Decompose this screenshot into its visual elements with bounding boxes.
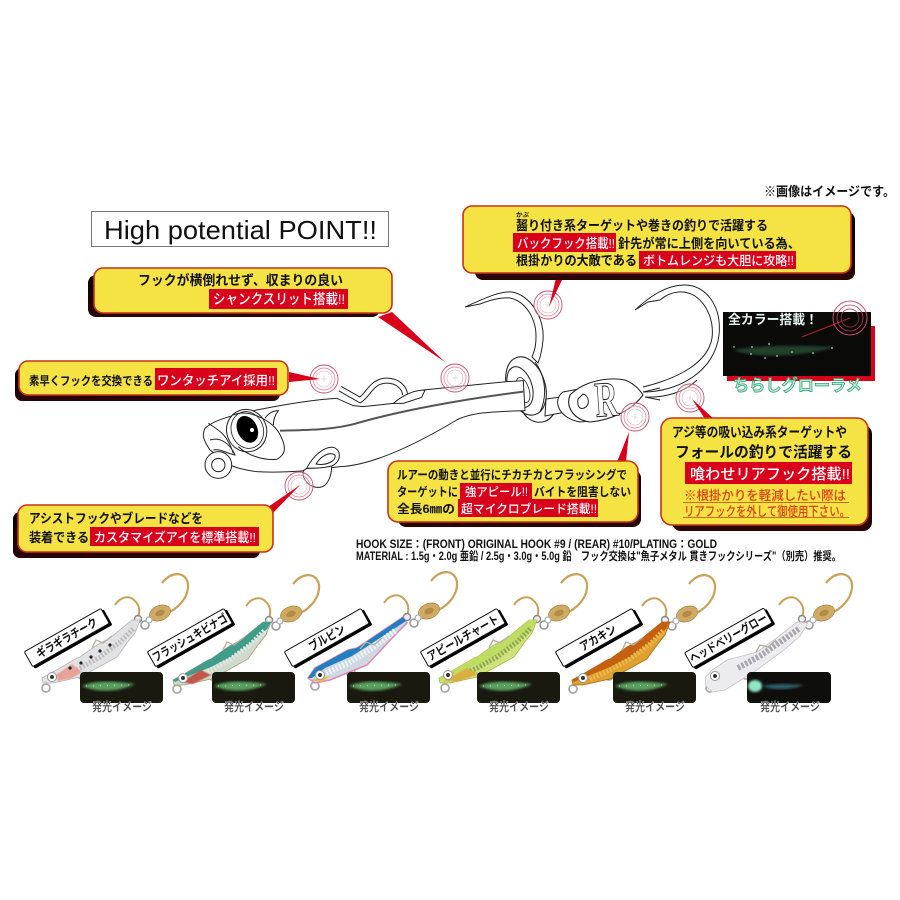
callout: back hook: バックフック搭載!! bbox=[517, 236, 615, 251]
glow image 5: 発光イメージ bbox=[625, 699, 685, 714]
callout: back hook: 針先が常に上側を向いている為、 bbox=[618, 236, 800, 251]
panel: glow lame: 全カラー搭載！ bbox=[728, 312, 818, 327]
glow image 1 bbox=[80, 672, 163, 714]
glow image 2 bbox=[212, 672, 295, 714]
label: フラッシュキビナゴ bbox=[147, 608, 235, 669]
callout: rear hook: フォールの釣りで活躍する bbox=[675, 443, 852, 461]
panel: glow lame bbox=[723, 301, 875, 395]
callout: one touch eye: 素早くフックを交換できる bbox=[29, 373, 153, 388]
label: アカキン: アカキン bbox=[577, 622, 619, 654]
callout: back hook bbox=[463, 206, 855, 307]
target: glow bbox=[833, 301, 867, 335]
glow fish bbox=[733, 343, 835, 359]
label: フラッシュキビナゴ: フラッシュキビナゴ bbox=[150, 610, 230, 665]
callout: custom eye: 装着できる bbox=[29, 530, 89, 545]
label: ブルピン: ブルピン bbox=[306, 621, 348, 654]
lure 1: ギラギラチーク bbox=[42, 574, 188, 692]
callout: micro blade: ルアーの動きと並行にチカチカとフラッシングで bbox=[397, 467, 627, 482]
title: High potential POINT!! bbox=[104, 215, 377, 245]
glow image 3 bbox=[347, 672, 430, 714]
spec text: HOOK SIZE：(FRONT) ORIGINAL HOOK #9 / (REAR) #10/PLATING：GOLD bbox=[356, 539, 717, 551]
target: blade bbox=[621, 403, 649, 431]
glow image 3: 発光イメージ bbox=[359, 699, 419, 714]
callout: back hook: 齧り付き系ターゲットや巻きの釣りで活躍する bbox=[516, 218, 768, 233]
callout: back hook: 根掛かりの大敵である bbox=[516, 253, 637, 268]
lure 3: ブルピン bbox=[308, 572, 457, 690]
callout: shank slit: フックが横倒れせず、収まりの良い bbox=[138, 272, 343, 288]
glow image 4: 発光イメージ bbox=[489, 699, 549, 714]
callout: micro blade: 全長6㎜の bbox=[397, 501, 455, 516]
callout: back hook: かぶ bbox=[516, 212, 529, 219]
glow image 2: 発光イメージ bbox=[224, 699, 284, 714]
target: custom eye bbox=[285, 472, 313, 500]
callout: back hook: ボトムレンジも大胆に攻略!! bbox=[643, 254, 794, 268]
label: ブルピン bbox=[284, 608, 372, 669]
glow image 5 bbox=[613, 672, 696, 714]
callout: rear hook: アジ等の吸い込み系ターゲットや bbox=[672, 424, 847, 440]
target: shank slit bbox=[441, 364, 469, 392]
callout: micro blade: ターゲットに bbox=[397, 484, 458, 499]
glow image 4 bbox=[477, 672, 560, 714]
lure 5: アカキン bbox=[569, 575, 715, 693]
lure 4: アピールチャート bbox=[439, 574, 587, 692]
callout: rear hook bbox=[661, 399, 872, 531]
wire clip bbox=[340, 381, 405, 400]
callout: micro blade bbox=[388, 432, 641, 527]
callout: shank slit bbox=[88, 268, 445, 362]
lure 2: フラッシュキビナゴ bbox=[173, 575, 319, 693]
label: ヘッドベリーグロー: ヘッドベリーグロー bbox=[687, 610, 770, 666]
target: rear hook bbox=[676, 384, 704, 412]
target: one touch eye bbox=[310, 365, 338, 393]
callout: micro blade: 超マイクロブレード搭載!! bbox=[461, 501, 597, 516]
callout: custom eye: アシストフックやブレードなどを bbox=[29, 511, 203, 526]
target: back hook bbox=[534, 291, 562, 319]
glow image 6: 発光イメージ bbox=[760, 699, 820, 714]
front eye ring bbox=[205, 452, 232, 478]
callout: micro blade: 強アピール!! bbox=[465, 485, 528, 499]
callout: custom eye bbox=[13, 485, 300, 558]
callout: rear hook: ※根掛かりを軽減したい際は bbox=[684, 488, 846, 503]
body ring bbox=[499, 352, 553, 420]
label: アピールチャート: アピールチャート bbox=[425, 612, 501, 664]
front hook bbox=[465, 292, 543, 363]
lure 6: ヘッドベリーグロー bbox=[705, 574, 852, 692]
weight bbox=[569, 379, 660, 422]
R mark: R bbox=[593, 370, 620, 428]
callout: rear hook: 喰わせリアフック搭載!! bbox=[690, 466, 850, 483]
blade eye bbox=[303, 447, 339, 487]
spec text bbox=[356, 539, 841, 563]
callout: custom eye: カスタマイズアイを標準搭載!! bbox=[94, 530, 256, 545]
lure line drawing bbox=[203, 285, 719, 487]
label: ギラギラチーク: ギラギラチーク bbox=[34, 615, 100, 661]
split ring and link bbox=[522, 385, 600, 422]
panel: glow lame: ちらしグローラメ bbox=[733, 375, 862, 395]
callout: rear hook: リアフックを外して御使用下さい。 bbox=[684, 504, 850, 519]
callout: one touch eye: ワンタッチアイ採用!! bbox=[157, 373, 275, 388]
rear hook bbox=[635, 285, 719, 397]
callout: micro blade: バイトを阻害しない bbox=[534, 484, 631, 499]
label: アカキン bbox=[555, 608, 643, 669]
glow image 1: 発光イメージ bbox=[92, 699, 152, 714]
ring front rim bbox=[535, 362, 545, 412]
lure body bbox=[203, 381, 525, 487]
glow image 6 bbox=[747, 672, 831, 714]
callout: shank slit: シャンクスリット搭載!! bbox=[213, 291, 345, 307]
eye bbox=[221, 404, 273, 458]
callout: one touch eye bbox=[15, 361, 320, 401]
